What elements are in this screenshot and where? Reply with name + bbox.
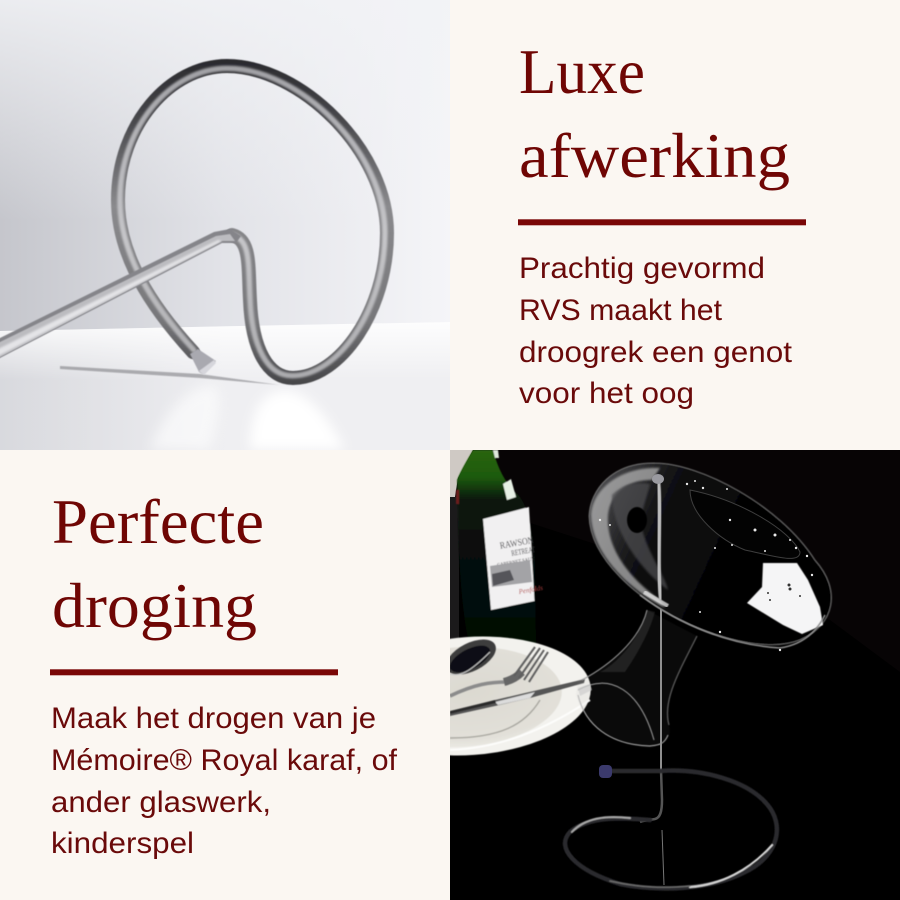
knife	[450, 679, 585, 716]
dark backdrop and table	[450, 450, 900, 900]
heading: Luxe afwerking	[519, 36, 790, 191]
panel: text Luxe afwerking	[518, 36, 806, 410]
wine label: Penfolds	[517, 584, 544, 596]
stem tip inside bowl	[658, 480, 661, 600]
panel: text Perfecte droging	[50, 486, 398, 860]
rack end cap	[599, 765, 612, 778]
bowl rim highlights	[640, 595, 825, 648]
icon: steel ring of drying rack	[118, 66, 387, 378]
heading: Perfecte droging: droging	[52, 570, 257, 641]
body text: drying: Mémoire® Royal karaf, of	[51, 744, 398, 777]
inner base of decanter	[690, 490, 800, 558]
heading underline	[50, 669, 338, 675]
panel: decanter on rack photo	[450, 450, 900, 900]
icon: rubber end cap	[190, 349, 216, 375]
body text: stainless steel	[519, 252, 792, 410]
decanter bowl	[589, 463, 831, 651]
body text: drying	[51, 702, 398, 860]
wine label	[483, 507, 544, 610]
wine label: RETREAT	[511, 545, 536, 558]
heading: Luxe afwerking: Luxe	[519, 36, 645, 107]
heading: Perfecte droging: Perfecte	[52, 486, 264, 557]
rack stem	[640, 600, 664, 885]
wine label: RAWSON	[499, 536, 534, 552]
white reflection patch	[747, 563, 823, 634]
panel: stainless steel rack photo	[0, 0, 450, 450]
fork	[450, 647, 548, 696]
body text: stainless steel: RVS maakt het	[519, 294, 722, 327]
white plate	[450, 636, 592, 756]
body text: drying: kinderspel	[51, 827, 194, 860]
heading: Perfecte droging	[52, 486, 264, 641]
wine label: CABERNET SAUV	[497, 557, 536, 569]
body text: stainless steel: droogrek een genot	[519, 336, 792, 369]
heading underline	[518, 219, 806, 225]
water droplets	[599, 480, 813, 651]
decanter neck	[576, 610, 697, 748]
body text: stainless steel: Prachtig gevormd	[519, 252, 765, 285]
body text: stainless steel: voor het oog	[519, 377, 694, 410]
spoon	[450, 638, 497, 676]
body text: drying: Maak het drogen van je	[51, 702, 376, 735]
droplets on white patch	[767, 584, 801, 601]
white table surface	[0, 322, 450, 450]
wine bottle with label	[456, 450, 544, 645]
body text: drying: ander glaswerk,	[51, 786, 271, 819]
rack base ring	[565, 771, 777, 888]
icon: straight rod of rack	[0, 229, 241, 359]
heading: Luxe afwerking: afwerking	[519, 120, 790, 191]
glass crescent reflection	[591, 468, 665, 608]
photo backdrop wall	[0, 0, 450, 340]
